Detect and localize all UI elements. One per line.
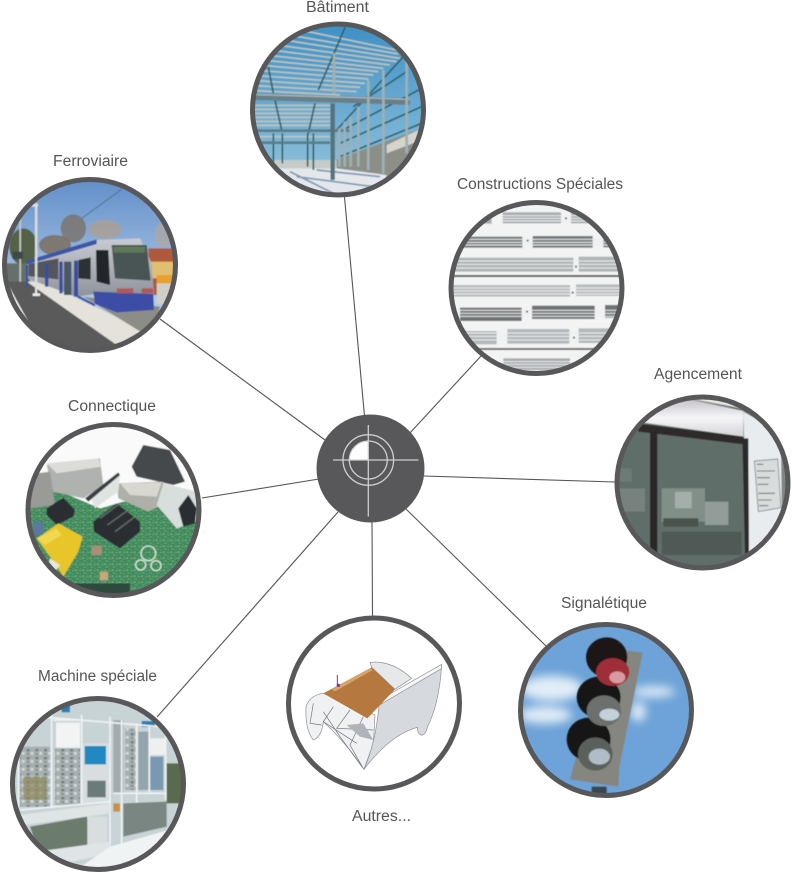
circle: Agencement photo of shop window [614,394,790,570]
circle: Autres with 3D model render [288,618,460,789]
circle: Connectique photo of circuit board [26,422,202,598]
label: Connectique: Connectique [68,398,156,415]
circle: Ferroviaire photo of tram [0,173,180,357]
circle: Constructions Spéciales photo of perforated panel [448,200,624,376]
connector lines from hub to circles [157,197,615,717]
label: Constructions Spéciales: Constructions Spéciales [457,176,623,193]
label: Autres...: Autres... [352,808,411,825]
label: Machine spéciale: Machine spéciale [38,668,157,685]
circle: Machine spéciale photo of automated line [10,696,186,872]
3D model: chair-like form [306,662,442,769]
label: Agencement: Agencement [654,366,743,383]
circle: Signalétique photo of traffic light [518,622,694,798]
central hub with crosshair icon [316,414,424,522]
circle: Bâtiment photo of steel frame [250,22,426,198]
label: Ferroviaire: Ferroviaire [53,153,128,170]
label: Signalétique: Signalétique [561,595,647,612]
